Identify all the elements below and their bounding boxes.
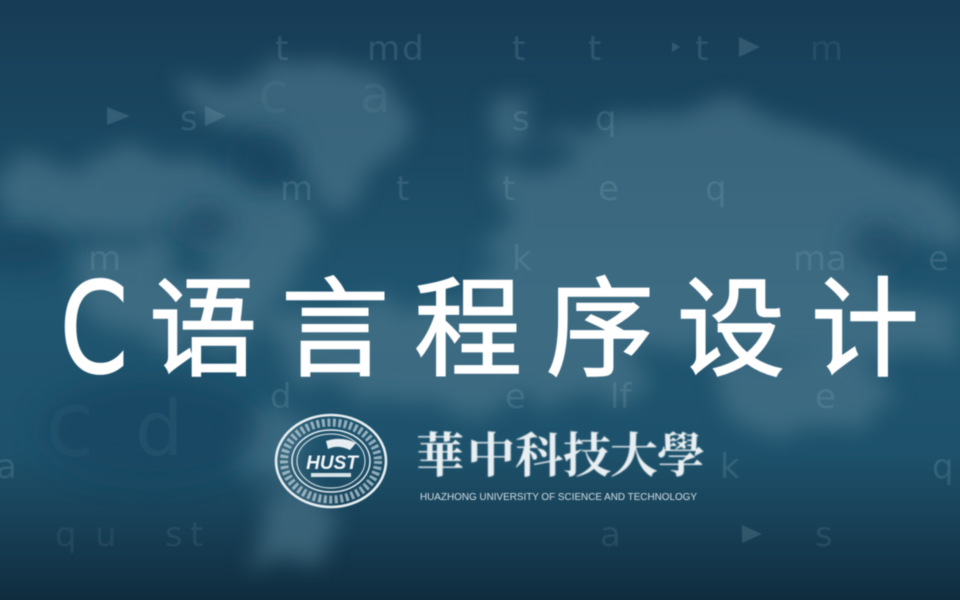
background: dark cloud gaps bbox=[0, 130, 910, 480]
icon: university seal bbox=[276, 415, 386, 507]
background: faint code letters: e bbox=[598, 169, 619, 209]
background: faint code letters: a bbox=[600, 515, 621, 555]
background: faint code letters: t bbox=[588, 29, 601, 69]
icon: university seal: HUST bbox=[306, 453, 359, 474]
background: faint code letters: s bbox=[180, 99, 198, 139]
university logo bbox=[276, 415, 705, 507]
background: faint code letters: e bbox=[505, 377, 526, 417]
background: faint code letters: c bbox=[45, 372, 94, 477]
logo wordmark: 華中科技大學: 華 bbox=[416, 417, 464, 486]
background: faint code letters: k bbox=[720, 447, 740, 487]
background: faint code letters: md bbox=[367, 29, 426, 69]
title: C语言程序设计 bbox=[60, 243, 919, 402]
background: faint code letters: ma bbox=[793, 239, 847, 279]
background: faint code letters: t bbox=[190, 515, 203, 555]
background: faint code letters: e bbox=[815, 377, 836, 417]
background: faint code letters: m bbox=[88, 239, 121, 279]
logo wordmark: 華中科技大學: 技 bbox=[563, 417, 611, 486]
logo wordmark: 華中科技大學: 學 bbox=[656, 417, 705, 486]
background: faint code letters: d bbox=[270, 377, 292, 417]
background: faint code letters: m bbox=[280, 169, 313, 209]
logo English name: HUAZHONG UNIVERSITY OF SCIENCE AND TECHNOLOGY bbox=[420, 491, 697, 503]
background: faint code letters: t bbox=[695, 29, 708, 69]
background: faint code letters: s bbox=[165, 515, 183, 555]
background: faint code letters: t bbox=[275, 29, 288, 69]
background: faint code letters: q bbox=[932, 447, 954, 487]
background: faint code letters: e bbox=[928, 239, 949, 279]
background: faint code letters: a bbox=[360, 66, 391, 124]
background: faint code letters: u bbox=[95, 515, 117, 555]
title characters: 程 bbox=[414, 243, 522, 399]
background: faint code letters: s bbox=[512, 99, 530, 139]
title characters: 计 bbox=[811, 243, 919, 399]
title letter C: C bbox=[60, 255, 128, 402]
background: faint code letters: lf bbox=[610, 377, 632, 417]
title characters: 序 bbox=[546, 243, 654, 399]
background: faint code letters: c bbox=[258, 61, 289, 126]
background: faint code letters: d bbox=[135, 384, 183, 473]
background: faint code letters: t bbox=[502, 169, 515, 209]
logo wordmark: 華中科技大學: 大 bbox=[610, 417, 658, 486]
title characters: 语 bbox=[149, 243, 257, 399]
logo wordmark: 華中科技大學: 科 bbox=[515, 417, 563, 486]
background: faint code letters: k bbox=[512, 239, 532, 279]
background: faint code letters: t bbox=[396, 169, 409, 209]
title characters: 言 bbox=[281, 243, 389, 399]
background: faint code letters: m bbox=[810, 29, 843, 69]
background: faint code letters: q bbox=[705, 169, 727, 209]
background: faint code letters: q bbox=[55, 515, 77, 555]
background: faint play arrows bbox=[107, 37, 762, 543]
background: faint code letters: q bbox=[595, 99, 617, 139]
background: faint code letters: s bbox=[815, 515, 833, 555]
background: faint code letters: t bbox=[512, 29, 525, 69]
logo wordmark: 華中科技大學: 中 bbox=[467, 417, 515, 486]
title characters: 设 bbox=[677, 243, 785, 399]
